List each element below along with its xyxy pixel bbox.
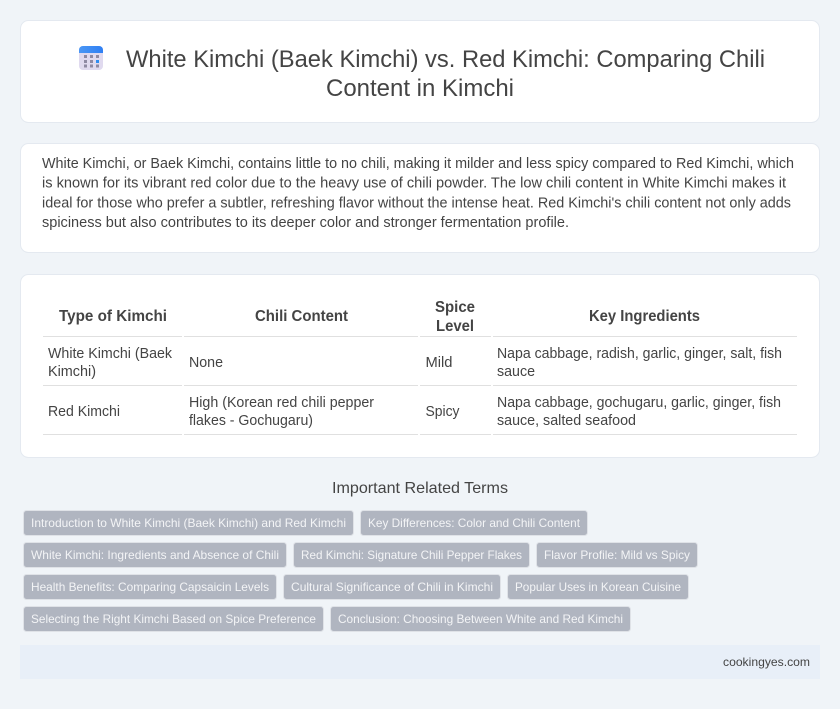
table row: white kimchi: None bbox=[189, 355, 223, 371]
table row: red kimchi: Red Kimchi bbox=[48, 404, 120, 420]
title bbox=[126, 46, 765, 102]
tag row 2: Red Kimchi: Signature Chili Pepper Flakes bbox=[301, 548, 522, 562]
table row: white kimchi: sauce bbox=[497, 364, 535, 380]
panel: comparison table bbox=[20, 274, 820, 458]
table header bbox=[59, 299, 700, 335]
table header: Chili Content bbox=[255, 308, 348, 325]
panel: introduction paragraph bbox=[20, 144, 820, 252]
tag row 1 bbox=[24, 510, 588, 536]
table row: red kimchi bbox=[48, 395, 781, 429]
footer bbox=[20, 645, 820, 679]
tag row 3: Cultural Significance of Chili in Kimchi bbox=[291, 580, 493, 594]
icon: calendar bbox=[79, 46, 103, 70]
title: White Kimchi (Baek Kimchi) vs. Red Kimchi: Comparing Chili bbox=[126, 46, 765, 73]
table header: Key Ingredients bbox=[589, 308, 700, 325]
text block: introduction bbox=[42, 156, 794, 231]
tag row 3 bbox=[24, 574, 688, 600]
table row: white kimchi bbox=[48, 346, 782, 380]
table row: red kimchi: Napa cabbage, gochugaru, garlic, ginger, fish bbox=[497, 395, 781, 411]
tag row 1: Introduction to White Kimchi (Baek Kimchi) and Red Kimchi bbox=[31, 516, 346, 530]
table row: white kimchi: Napa cabbage, radish, garlic, ginger, salt, fish bbox=[497, 346, 782, 362]
table row: red kimchi: High (Korean red chili pepper bbox=[189, 395, 374, 411]
table row: red kimchi: flakes - Gochugaru) bbox=[189, 413, 313, 429]
text block: introduction: White Kimchi, or Baek Kimchi, contains little to no chili, making it milder and less spicy compared to Red Kimchi, which bbox=[42, 156, 794, 172]
tag row 4: Selecting the Right Kimchi Based on Spice Preference bbox=[31, 612, 316, 626]
table header: Spice bbox=[435, 299, 475, 316]
tag list: related terms bbox=[24, 510, 698, 632]
tag row 2: White Kimchi: Ingredients and Absence of Chili bbox=[31, 548, 279, 562]
title: Content in Kimchi bbox=[326, 75, 514, 102]
tag row 4: Conclusion: Choosing Between White and Red Kimchi bbox=[338, 612, 623, 626]
table header: Level bbox=[436, 318, 474, 335]
table row: white kimchi: Mild bbox=[426, 355, 452, 371]
heading: related terms: Important Related Terms bbox=[332, 480, 508, 497]
tag row 2: Flavor Profile: Mild vs Spicy bbox=[544, 548, 690, 562]
tag row 2 bbox=[24, 542, 698, 568]
text block: introduction: is known for its vibrant red color due to the heavy use of chili powder. The low chili content in White Kimchi makes it bbox=[42, 176, 786, 192]
table row: white kimchi: White Kimchi (Baek bbox=[48, 346, 173, 362]
tag row 1: Key Differences: Color and Chili Content bbox=[368, 516, 581, 530]
table row: red kimchi: sauce, salted seafood bbox=[497, 413, 636, 429]
tag row 3: Health Benefits: Comparing Capsaicin Levels bbox=[31, 580, 269, 594]
panel: header bbox=[20, 20, 820, 122]
table row: white kimchi: Kimchi) bbox=[48, 364, 96, 380]
text block: introduction: spiciness but also contributes to its deeper color and stronger fermentation profile. bbox=[42, 215, 569, 231]
table header: Type of Kimchi bbox=[59, 308, 167, 325]
table row: red kimchi: Spicy bbox=[426, 404, 460, 420]
tag row 4 bbox=[24, 606, 630, 632]
tag row 3: Popular Uses in Korean Cuisine bbox=[515, 580, 681, 594]
text block: introduction: ideal for those who prefer a subtler, refreshing flavor without the intense heat. Red Kimchi's chili content not only adds bbox=[42, 195, 791, 211]
footer: cookingyes.com bbox=[723, 655, 810, 669]
